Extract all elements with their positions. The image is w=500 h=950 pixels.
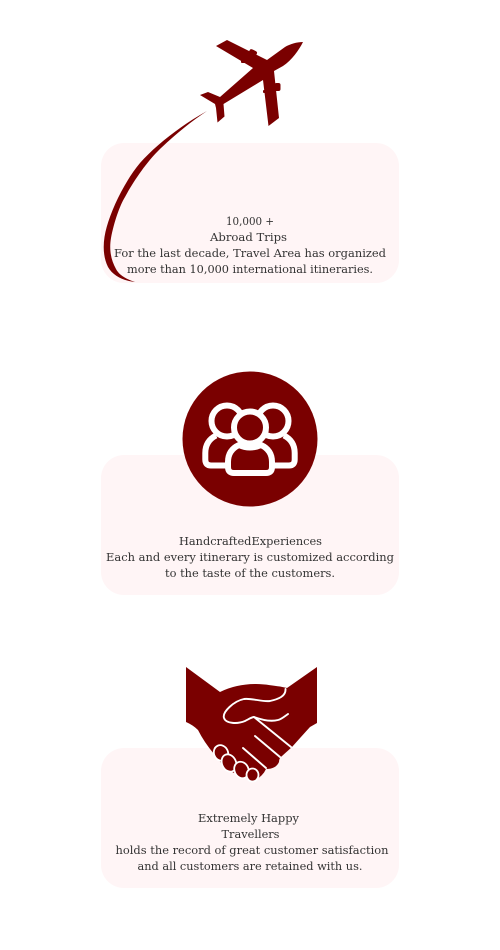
text: handcrafted experiences: Each and every itinerary is customized according <box>106 550 395 564</box>
text: abroad trips: For the last decade, Travel Area has organized <box>114 246 387 260</box>
panel: handcrafted experiences <box>101 372 399 595</box>
icon: handshake <box>186 667 317 782</box>
text: handcrafted experiences: to the taste of the customers. <box>165 566 335 580</box>
card background: handcrafted experiences <box>101 455 399 595</box>
panel: abroad trips <box>101 40 399 283</box>
panel: extremely happy travellers <box>101 667 399 888</box>
text: abroad trips: 10,000 + <box>226 214 274 228</box>
text: abroad trips <box>114 214 387 276</box>
icon: airplane <box>200 40 303 126</box>
text: extremely happy travellers <box>116 811 389 873</box>
text: extremely happy travellers: Extremely Happy <box>198 811 299 825</box>
card background: extremely happy travellers <box>101 748 399 888</box>
text: abroad trips: more than 10,000 international itineraries. <box>127 262 373 276</box>
text: handcrafted experiences: HandcraftedExperiences <box>179 534 322 548</box>
swoosh trail <box>104 111 207 282</box>
icon: group of people in circle <box>182 372 318 506</box>
text: extremely happy travellers: Travellers <box>222 827 280 841</box>
text: abroad trips: Abroad Trips <box>209 230 287 244</box>
text: extremely happy travellers: holds the record of great customer satisfaction <box>116 843 389 857</box>
text: extremely happy travellers: and all customers are retained with us. <box>138 859 362 873</box>
card background: abroad trips <box>101 143 399 283</box>
text: handcrafted experiences <box>106 534 395 580</box>
